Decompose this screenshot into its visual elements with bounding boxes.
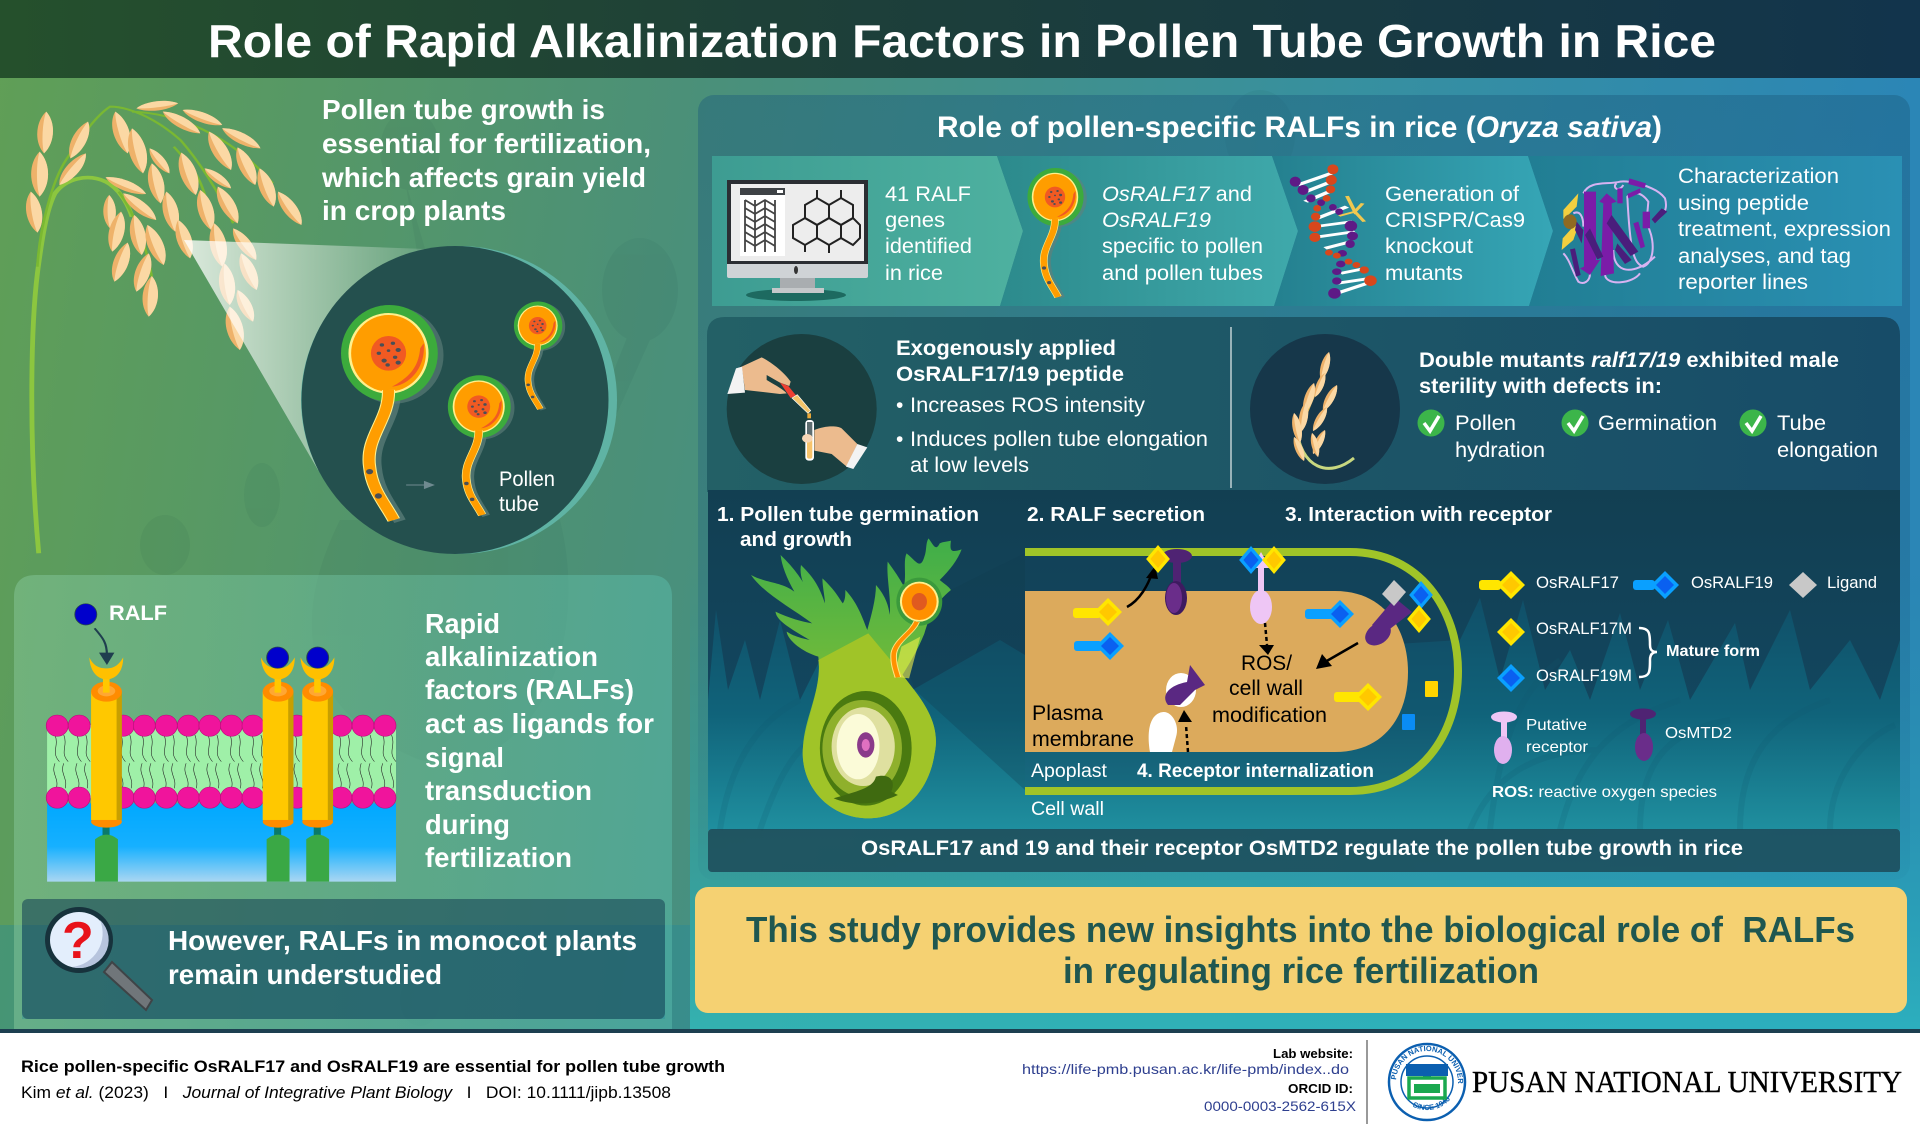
legend: OsRALF19M xyxy=(1497,664,1632,692)
label: RALF: RALF xyxy=(109,602,167,625)
panel: role of pollen-specific RALFs xyxy=(698,95,1910,880)
arrow: receptor to ROS xyxy=(1316,643,1358,669)
footer: lab links: 0000-0003-2562-615X xyxy=(1204,1098,1357,1114)
conclusion box: This study provides new insights into the biological role of RALFs xyxy=(746,909,1855,950)
pollen grain: medium xyxy=(448,375,514,516)
check: germination xyxy=(1562,410,1717,436)
text: exogenously applied peptide xyxy=(896,337,1208,477)
legend xyxy=(1479,571,1877,801)
check: pollen hydration xyxy=(1418,410,1545,462)
text: 41 RALF xyxy=(885,183,971,206)
icon: magnifying glass with question mark xyxy=(45,907,152,1010)
text: Generation of xyxy=(1385,183,1519,206)
headings: 3. Interaction with receptor xyxy=(1285,504,1552,526)
text: pollen tube growth is essential xyxy=(321,94,651,226)
pollen grain: small xyxy=(514,301,565,410)
text: exogenously applied peptide: OsRALF17/19 peptide xyxy=(896,363,1124,386)
text xyxy=(1102,183,1263,285)
callout: monocot RALFs understudied xyxy=(22,899,665,1019)
legend: mature form bracket xyxy=(1639,628,1760,677)
icon: rice sprig xyxy=(1250,334,1400,484)
footer: lab links: https://life-pmb.pusan.ac.kr/life-pmb/index..do xyxy=(1022,1061,1349,1077)
panel: peptide and double mutants xyxy=(707,317,1900,492)
conclusion box xyxy=(695,887,1907,1013)
text: exogenously applied peptide: • xyxy=(896,394,903,417)
check: germination: Germination xyxy=(1598,412,1717,435)
legend: OsRALF17M: OsRALF17M xyxy=(1536,619,1632,638)
arrow: ligand to receptor xyxy=(95,628,114,665)
text: double mutants xyxy=(1418,349,1878,462)
footer: lab links: ORCID ID: xyxy=(1288,1081,1353,1096)
label: ROS cell wall modification: cell wall xyxy=(1229,677,1303,700)
arrow: to ROS xyxy=(1259,623,1274,655)
legend: OsRALF17M xyxy=(1497,618,1632,646)
logo: university seal xyxy=(1388,1042,1466,1122)
legend: OsRALF19 xyxy=(1633,571,1773,599)
text: RALFs act as ligands: during xyxy=(425,809,510,840)
text: exogenously applied peptide: at low levels xyxy=(910,454,1029,477)
text: knockout xyxy=(1385,235,1473,258)
legend: OsMTD2 xyxy=(1630,708,1732,761)
text: identified xyxy=(885,235,972,258)
receptor internalization xyxy=(1149,665,1205,752)
panel: mechanism diagram xyxy=(708,490,1900,872)
arrow: internalization xyxy=(1178,710,1192,752)
label: pollen tube xyxy=(499,468,555,516)
panel: RALF signalling at membrane xyxy=(14,575,672,1029)
label: plasma membrane xyxy=(1032,702,1134,751)
text: pollen tube growth is essential: Pollen tube growth is xyxy=(322,94,605,125)
heading: Role of pollen-specific RALFs in rice (Oryza sativa) xyxy=(937,111,1662,144)
text: RALFs act as ligands: fertilization xyxy=(425,842,572,873)
text: mutants xyxy=(1385,262,1463,285)
receptor: tilted with ligands xyxy=(1361,580,1433,650)
label: receptor internalization: 4. Receptor internalization xyxy=(1137,761,1374,782)
legend: OsRALF19: OsRALF19 xyxy=(1691,573,1773,592)
conclusion box: in regulating rice fertilization xyxy=(1063,950,1539,991)
illustration: pistil with pollen tube xyxy=(751,538,962,818)
text: RALFs act as ligands: transduction xyxy=(425,775,592,806)
label: ROS cell wall modification: modification xyxy=(1212,704,1327,727)
logo: university seal: PUSAN NATIONAL UNIVERSITY xyxy=(1391,1046,1464,1084)
step: OsRALF17 and OsRALF19 xyxy=(997,156,1298,306)
text: remain understudied xyxy=(168,959,442,990)
check: pollen hydration: Pollen xyxy=(1455,412,1516,435)
text: OsRALF19 xyxy=(1102,209,1211,232)
headings: 1. Pollen tube germination xyxy=(717,504,979,526)
text: exogenously applied peptide: Increases ROS intensity xyxy=(910,394,1146,417)
text: exogenously applied peptide: Induces pollen tube elongation xyxy=(910,428,1208,451)
check: pollen hydration: hydration xyxy=(1455,439,1545,462)
step: 41 RALF genes xyxy=(712,156,1023,306)
RALF ligands xyxy=(75,604,329,668)
legend: OsRALF17 xyxy=(1479,571,1619,599)
text xyxy=(885,183,972,285)
decoration: grass xyxy=(708,598,1900,830)
check: tube elongation: elongation xyxy=(1777,439,1878,462)
text: and pollen tubes xyxy=(1102,262,1263,285)
footer: citation xyxy=(21,1057,725,1102)
icon: computer monitor xyxy=(727,180,868,301)
arrow: secretion xyxy=(1127,573,1152,607)
legend: mature form bracket: Mature form xyxy=(1666,643,1760,660)
receptor: putative with ligands xyxy=(1239,546,1286,624)
membrane bilayer xyxy=(46,715,396,882)
magnified view: pollen tubes in circle xyxy=(184,240,617,554)
check: tube elongation: Tube xyxy=(1777,412,1826,435)
icon: pollen xyxy=(1027,168,1087,298)
text: treatment, expression xyxy=(1678,218,1891,241)
footer: lab links: Lab website: xyxy=(1273,1046,1353,1061)
legend: putative receptor: Putative xyxy=(1526,717,1587,734)
text: RALFs act as ligands xyxy=(425,608,654,873)
receptor: OsMTD2 with ligand xyxy=(1146,545,1192,615)
icon: magnifying glass with question mark: ? xyxy=(62,912,94,970)
logo: university seal: SINCE 1946 xyxy=(1413,1096,1450,1110)
label: pollen tube: Pollen xyxy=(499,468,555,491)
background: bottom teal band xyxy=(0,925,690,1029)
zoom cone xyxy=(890,553,1025,790)
text xyxy=(1678,165,1891,294)
text: RALFs act as ligands: signal xyxy=(425,742,504,773)
background: faint pollen silhouettes xyxy=(140,90,1528,1026)
label: apoplast: Apoplast xyxy=(1031,761,1108,782)
text: However, RALFs in monocot plants xyxy=(168,925,637,956)
illustration: rice panicle xyxy=(23,99,308,553)
headings xyxy=(717,504,1552,551)
summary bar: OsRALF17 and 19 and their receptor OsMTD2 regulate the pollen tube growth in rice xyxy=(861,837,1743,860)
text: pollen tube growth is essential: in crop plants xyxy=(322,195,506,226)
legend: ligand xyxy=(1789,572,1877,598)
label: pollen tube: tube xyxy=(499,493,539,516)
text: RALFs act as ligands: act as ligands for xyxy=(425,708,654,739)
text: pollen tube growth is essential: which affects grain yield xyxy=(321,162,646,193)
receptor 3 xyxy=(301,657,334,882)
logo: university name: PUSAN NATIONAL UNIVERSITY xyxy=(1472,1064,1902,1099)
legend: OsMTD2: OsMTD2 xyxy=(1665,725,1732,742)
check: tube elongation xyxy=(1740,410,1878,462)
title bar xyxy=(0,0,1920,78)
legend: ROS definition: ROS: reactive oxygen species xyxy=(1492,784,1717,801)
text xyxy=(1385,183,1525,285)
text: OsRALF17 and xyxy=(1102,183,1252,206)
step: characterization xyxy=(1528,156,1902,306)
text xyxy=(168,925,637,990)
label: cell wall: Cell wall xyxy=(1031,799,1104,820)
proprotein: yellow xyxy=(1073,598,1122,626)
pollen grain: large xyxy=(341,305,444,521)
magnifying cone xyxy=(184,240,425,470)
diagram: apoplast and plasma membrane xyxy=(1025,545,1458,820)
receptor 1 xyxy=(89,657,123,882)
legend: OsRALF17: OsRALF17 xyxy=(1536,573,1619,592)
text: genes xyxy=(885,209,945,232)
footer: lab links xyxy=(1022,1046,1357,1114)
icon: DNA helix xyxy=(1290,164,1377,299)
icon: protein ribbon xyxy=(1562,178,1667,283)
receptor 2 xyxy=(261,657,295,882)
label: plasma membrane: Plasma xyxy=(1032,702,1103,725)
text: CRISPR/Cas9 xyxy=(1385,209,1525,232)
headings: and growth xyxy=(740,529,852,551)
bottom stripe xyxy=(0,1029,1920,1033)
text: pollen tube growth is essential: essential for fertilization, xyxy=(322,128,651,159)
legend: putative receptor: receptor xyxy=(1526,739,1589,756)
proprotein: yellow right xyxy=(1334,683,1382,711)
mature peptides xyxy=(1402,681,1438,730)
headings: 2. RALF secretion xyxy=(1027,504,1205,526)
arrow head xyxy=(1146,566,1158,579)
proprotein: blue right xyxy=(1305,600,1354,628)
text: double mutants: Double mutants ralf17/19 exhibited male xyxy=(1419,349,1839,372)
label: ROS cell wall modification xyxy=(1212,652,1327,727)
summary bar xyxy=(708,829,1900,872)
text: RALFs act as ligands: factors (RALFs) xyxy=(425,674,634,705)
label: plasma membrane: membrane xyxy=(1032,728,1134,751)
label: ROS cell wall modification: ROS/ xyxy=(1241,652,1292,675)
text: specific to pollen xyxy=(1102,235,1263,258)
text: Characterization xyxy=(1678,165,1839,188)
text: RALFs act as ligands: alkalinization xyxy=(425,641,598,672)
proprotein: blue xyxy=(1074,632,1124,660)
legend: OsRALF19M: OsRALF19M xyxy=(1536,666,1632,685)
text: using peptide xyxy=(1678,192,1809,215)
text: reporter lines xyxy=(1678,271,1808,294)
legend: putative receptor xyxy=(1491,712,1589,764)
text: analyses, and tag xyxy=(1678,245,1851,268)
text: in rice xyxy=(885,262,943,285)
title: Role of Rapid Alkalinization Factors in Pollen Tube Growth in Rice xyxy=(208,15,1716,67)
text: double mutants: sterility with defects in: xyxy=(1419,375,1662,398)
footer: citation: Kim et al. (2023) I Journal of Integrative Plant Biology I DOI: 10.1111/jipb.13508 xyxy=(21,1083,671,1102)
icon: hands with dropper xyxy=(727,334,877,484)
step: CRISPR mutants xyxy=(1272,156,1553,306)
text: RALFs act as ligands: Rapid xyxy=(425,608,500,639)
text: exogenously applied peptide: Exogenously applied xyxy=(896,337,1116,360)
footer: citation: Rice pollen-specific OsRALF17 and OsRALF19 are essential for pollen tube growth xyxy=(21,1057,725,1076)
legend: ligand: Ligand xyxy=(1827,573,1877,592)
text: exogenously applied peptide: • xyxy=(896,428,903,451)
